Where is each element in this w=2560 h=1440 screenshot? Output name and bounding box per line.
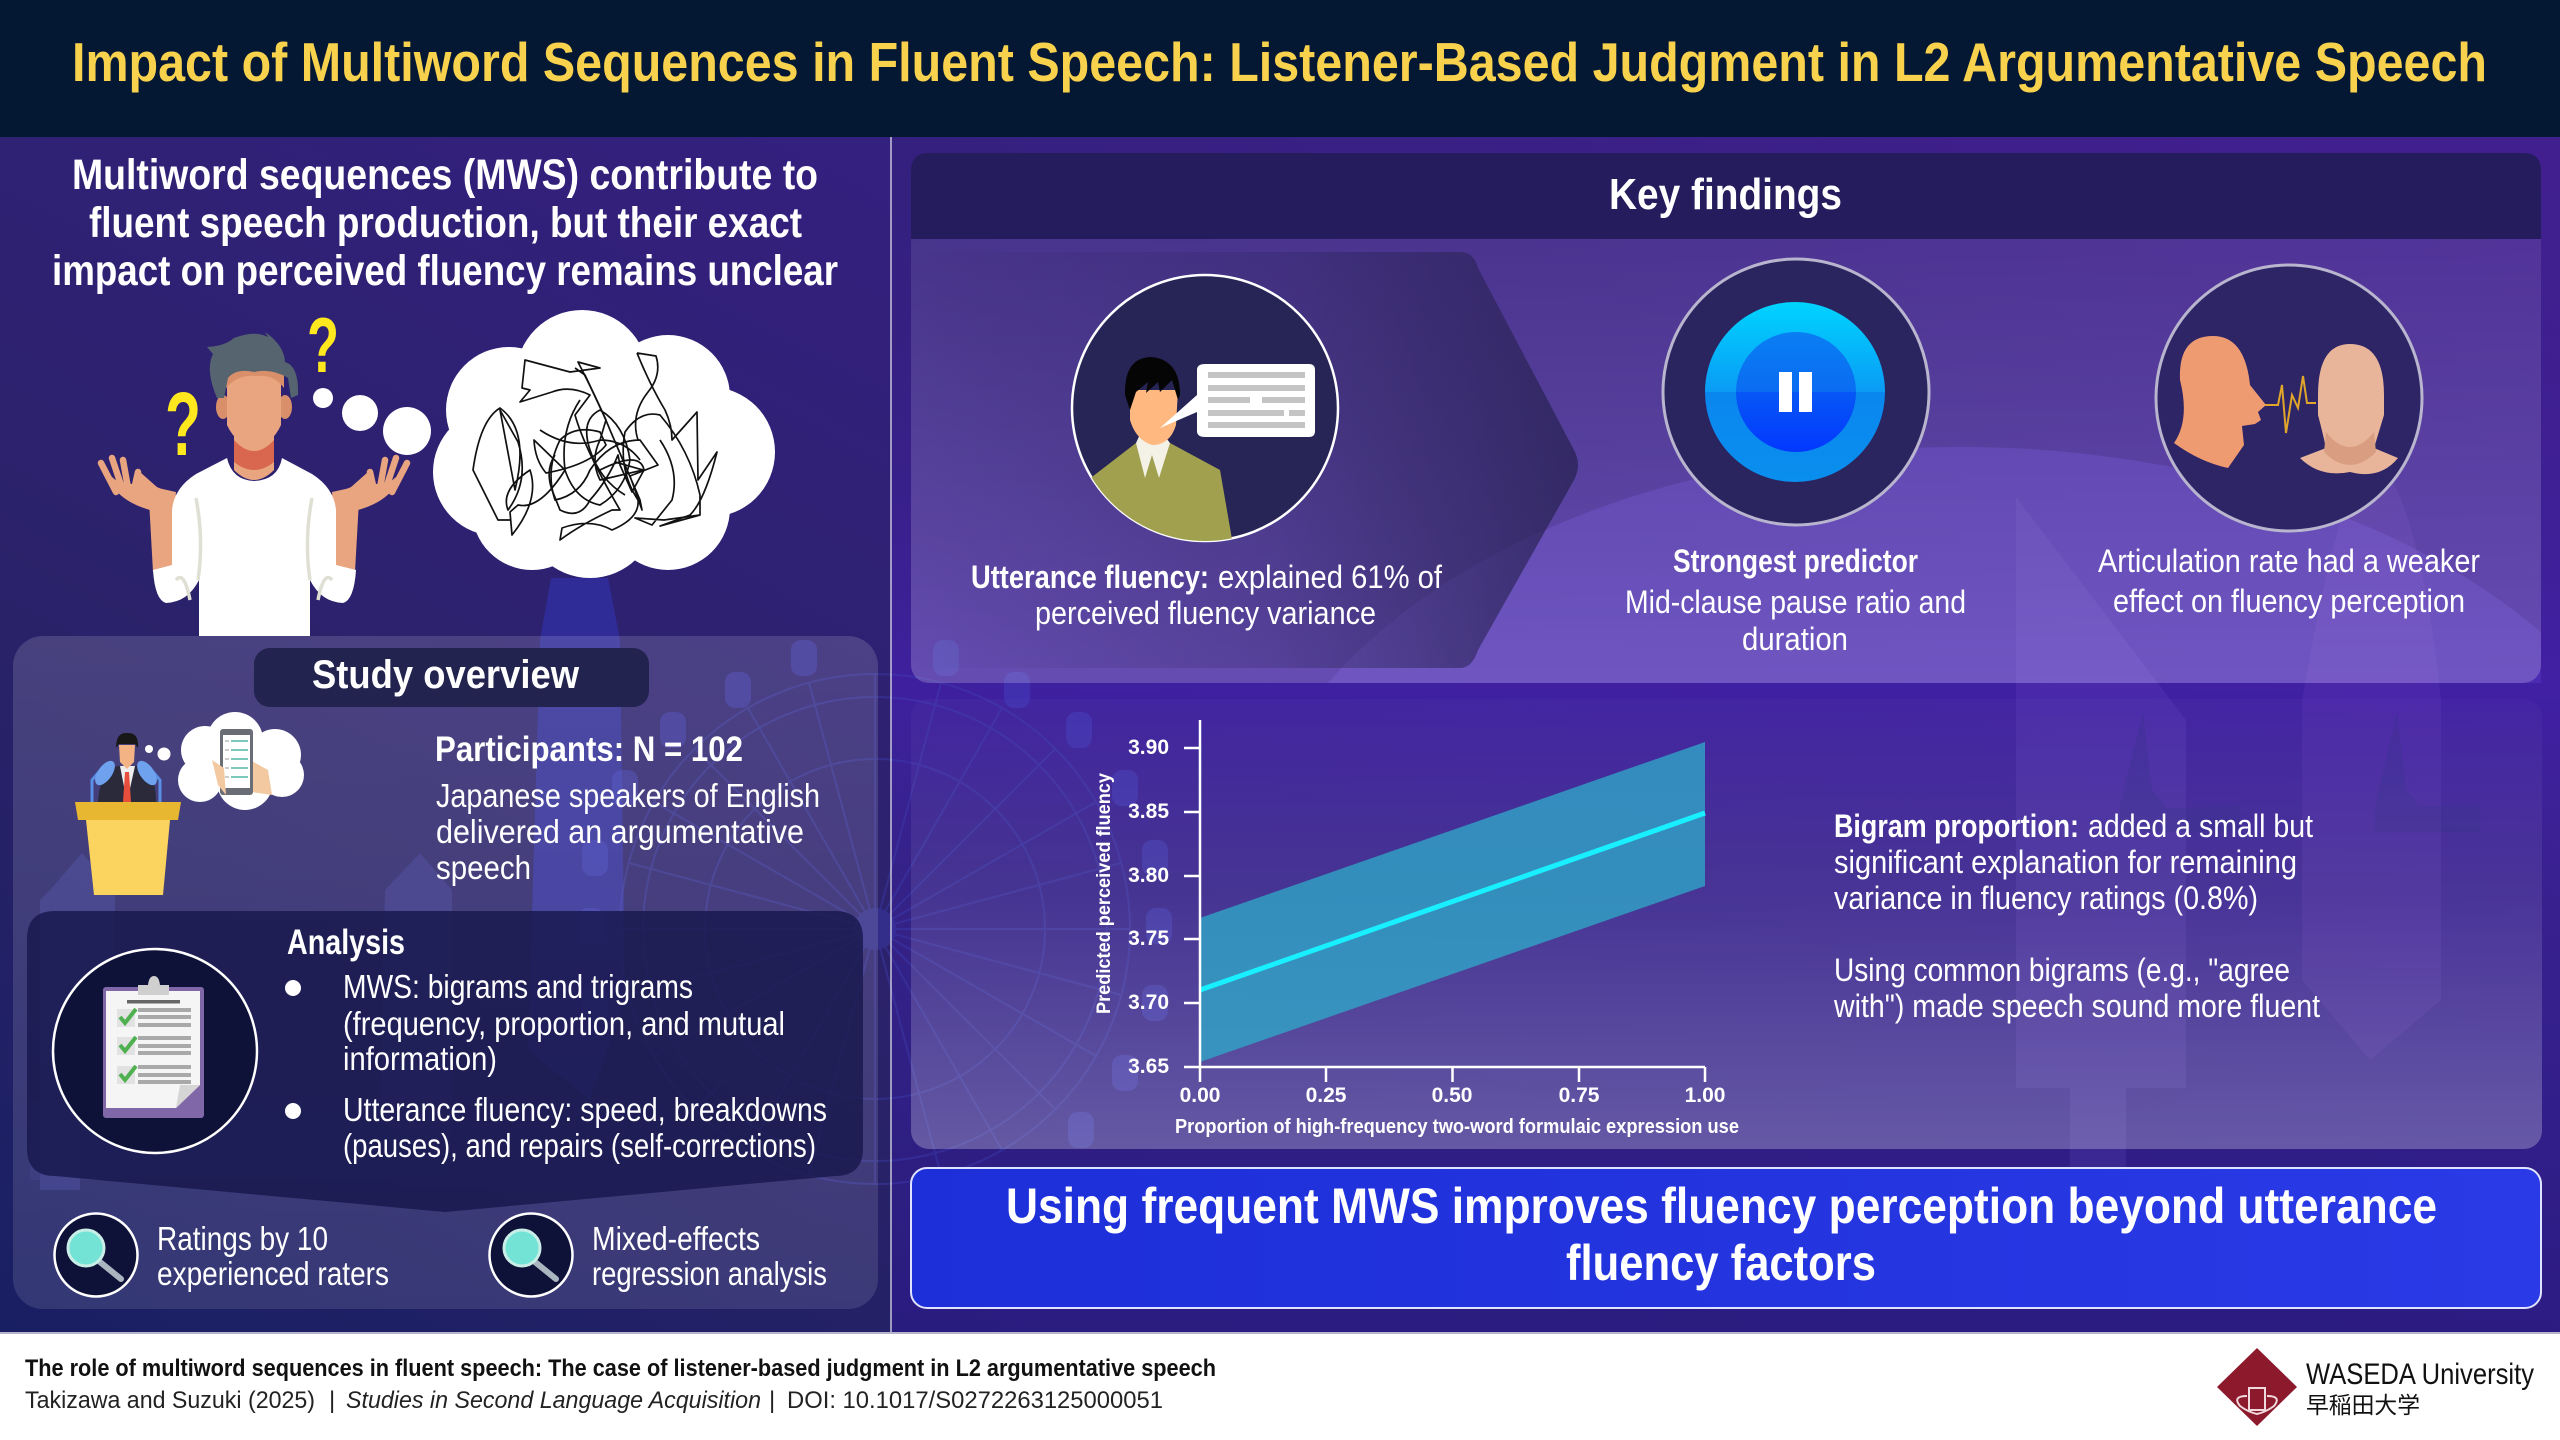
icon: listening faces	[2156, 265, 2422, 531]
regression text: regression analysis	[592, 1255, 827, 1292]
line chart: perceived fluency: 3.65	[1128, 1055, 1169, 1078]
citation: |	[769, 1387, 775, 1414]
line chart: perceived fluency: 3.70	[1128, 991, 1169, 1014]
icon: speaker at lectern	[75, 712, 304, 895]
heading: study overview	[254, 648, 649, 707]
panel: analysis	[27, 911, 863, 1212]
chart explanation: added a small but	[2088, 808, 2313, 844]
line chart: perceived fluency: Proportion of high-frequency two-word formulaic expression use	[1175, 1116, 1739, 1138]
citation: Studies in Second Language Acquisition	[346, 1387, 761, 1414]
line chart: perceived fluency: 1.00	[1685, 1084, 1725, 1107]
analysis text: (pauses), and repairs (self-corrections)	[343, 1127, 816, 1164]
finding: utterance fluency: Utterance fluency:	[971, 559, 1209, 595]
regression text: Mixed-effects	[592, 1220, 760, 1257]
citation: DOI: 10.1017/S0272263125000051	[787, 1387, 1163, 1414]
participants text: Japanese speakers of English	[436, 777, 820, 814]
chart explanation: Bigram proportion:	[1834, 808, 2079, 844]
finding: utterance fluency: explained 61% of	[1218, 559, 1442, 595]
chart explanation: Using common bigrams (e.g., "agree	[1834, 952, 2290, 988]
icon: question marks: ?	[165, 375, 201, 475]
panel: chart	[911, 699, 2542, 1149]
analysis text: Utterance fluency: speed, breakdowns	[343, 1091, 827, 1128]
icon: question marks: ?	[307, 301, 339, 389]
icon: clipboard checklist	[53, 949, 257, 1153]
arrow backdrop	[911, 252, 1578, 668]
ferris wheel silhouette	[578, 640, 1172, 1184]
chart explanation: variance in fluency ratings (0.8%)	[1834, 880, 2258, 916]
citation	[25, 1355, 1216, 1414]
line chart: perceived fluency: 3.85	[1128, 800, 1169, 823]
icon: thought cloud with tangled lines	[313, 310, 775, 578]
heading: key findings: Key findings	[1609, 170, 1842, 219]
analysis text: Analysis	[287, 923, 405, 962]
icon: confused man	[101, 332, 407, 636]
heading: study overview: Study overview	[312, 653, 580, 697]
icon: magnifier regression	[490, 1214, 572, 1296]
icon: question marks	[165, 301, 339, 475]
finding: articulation rate: Articulation rate had a weaker	[2098, 543, 2480, 579]
icon: pause button	[1663, 259, 1929, 525]
panel: key findings	[911, 153, 2541, 683]
analysis text: MWS: bigrams and trigrams	[343, 968, 693, 1005]
analysis text: (frequency, proportion, and mutual	[343, 1005, 785, 1042]
finding: strongest predictor	[1625, 543, 1966, 657]
citation: Takizawa and Suzuki (2025)	[25, 1387, 315, 1414]
line chart: perceived fluency: 0.75	[1559, 1084, 1600, 1107]
raters text	[157, 1220, 389, 1292]
participants text	[435, 730, 820, 886]
conclusion banner: fluency factors	[1566, 1235, 1876, 1291]
header bar	[0, 0, 2560, 137]
participants text: Participants: N = 102	[435, 730, 743, 769]
regression text	[592, 1220, 827, 1292]
panel: study overview	[13, 636, 878, 1309]
icon: magnifier raters	[54, 1214, 138, 1296]
raters text: experienced raters	[157, 1255, 389, 1292]
chart explanation: with") made speech sound more fluent	[1833, 988, 2320, 1024]
chart explanation	[1833, 808, 2320, 1024]
finding: strongest predictor: Strongest predictor	[1673, 543, 1918, 579]
conclusion banner	[911, 1168, 2541, 1308]
logo: Waseda University	[2217, 1348, 2534, 1426]
divider	[890, 137, 892, 1334]
line chart: perceived fluency: 0.00	[1180, 1084, 1220, 1107]
finding: articulation rate	[2098, 543, 2480, 619]
citation: The role of multiword sequences in fluent speech: The case of listener-based judgment in L2 argumentative speech	[25, 1355, 1216, 1382]
line chart: perceived fluency: 3.75	[1128, 927, 1169, 950]
line chart: perceived fluency: 0.50	[1432, 1084, 1472, 1107]
footer	[0, 1333, 2560, 1440]
finding: strongest predictor: Mid-clause pause ratio and	[1625, 584, 1966, 620]
heading: key findings	[911, 153, 2541, 239]
finding: articulation rate: effect on fluency perception	[2113, 583, 2465, 619]
line chart: perceived fluency: 0.25	[1306, 1084, 1347, 1107]
line chart: perceived fluency: 3.90	[1128, 736, 1169, 759]
analysis text: information)	[343, 1040, 497, 1077]
line chart: perceived fluency	[1094, 720, 1739, 1138]
line chart: perceived fluency: Predicted perceived fluency	[1094, 773, 1115, 1014]
finding: utterance fluency: perceived fluency variance	[1035, 595, 1376, 631]
participants text: delivered an argumentative	[436, 813, 804, 850]
logo: Waseda University: 早稲田大学	[2306, 1392, 2420, 1418]
citation: |	[329, 1387, 335, 1414]
finding: utterance fluency	[971, 559, 1442, 631]
chart explanation: significant explanation for remaining	[1834, 844, 2297, 880]
left intro text: fluent speech production, but their exact	[89, 199, 802, 247]
left intro text: impact on perceived fluency remains unclear	[52, 247, 838, 295]
analysis text	[285, 923, 827, 1164]
line chart: perceived fluency: 3.80	[1128, 864, 1169, 887]
left intro text	[52, 151, 838, 295]
raters text: Ratings by 10	[157, 1220, 328, 1257]
finding: strongest predictor: duration	[1742, 621, 1848, 657]
left intro text: Multiword sequences (MWS) contribute to	[72, 151, 818, 199]
participants text: speech	[436, 849, 531, 886]
icon: man speaking	[1072, 275, 1338, 545]
